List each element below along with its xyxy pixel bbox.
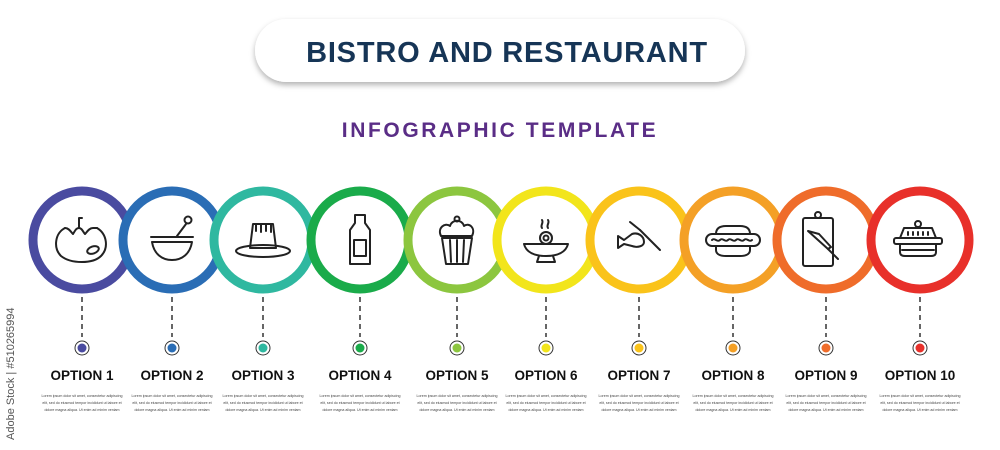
icon: cutting board and knife (803, 212, 838, 266)
option 6 (497, 191, 595, 412)
option 8: OPTION 8 (701, 368, 765, 383)
option 10: Lorem ipsum dolor sit amet, consectetur adipiscing (880, 394, 960, 398)
option 2 (123, 191, 221, 412)
option 4 (311, 191, 409, 412)
option 8: dolore magna aliqua. Ut enim ad minim veniam (695, 408, 771, 412)
option 1: Lorem ipsum dolor sit amet, consectetur adipiscing (42, 394, 122, 398)
option 4: Lorem ipsum dolor sit amet, consectetur adipiscing (320, 394, 400, 398)
option 3: Lorem ipsum dolor sit amet, consectetur adipiscing (223, 394, 303, 398)
option 5: OPTION 5 (425, 368, 489, 383)
option 7 (590, 191, 688, 412)
option 1: dolore magna aliqua. Ut enim ad minim veniam (44, 408, 120, 412)
option 10: OPTION 10 (885, 368, 955, 383)
option 3: dolore magna aliqua. Ut enim ad minim veniam (225, 408, 301, 412)
option 4: elit, sed do eiusmod tempor incididunt ut labore et (320, 401, 400, 405)
option 5 (408, 191, 506, 412)
option 10: dolore magna aliqua. Ut enim ad minim veniam (882, 408, 958, 412)
option 9: elit, sed do eiusmod tempor incididunt ut labore et (786, 401, 866, 405)
option 8: elit, sed do eiusmod tempor incididunt ut labore et (693, 401, 773, 405)
option 8: Lorem ipsum dolor sit amet, consectetur adipiscing (693, 394, 773, 398)
option 5: Lorem ipsum dolor sit amet, consectetur adipiscing (417, 394, 497, 398)
option 4: OPTION 4 (328, 368, 392, 383)
icon: noodles bowl (524, 220, 568, 262)
title: BISTRO AND RESTAURANT (306, 37, 708, 69)
icon: fish and knife (618, 222, 660, 250)
option 9: dolore magna aliqua. Ut enim ad minim veniam (788, 408, 864, 412)
option 6: elit, sed do eiusmod tempor incididunt ut labore et (506, 401, 586, 405)
option 7: OPTION 7 (607, 368, 671, 383)
icon: bottle (350, 215, 370, 264)
option 2: elit, sed do eiusmod tempor incididunt ut labore et (132, 401, 212, 405)
option 8 (684, 191, 782, 412)
option 1 (33, 191, 131, 412)
icon: cupcake (440, 216, 473, 264)
option 6: Lorem ipsum dolor sit amet, consectetur adipiscing (506, 394, 586, 398)
option 6: OPTION 6 (514, 368, 578, 383)
option 9 (777, 191, 875, 412)
option 9: Lorem ipsum dolor sit amet, consectetur adipiscing (786, 394, 866, 398)
subtitle: INFOGRAPHIC TEMPLATE (342, 119, 658, 142)
side watermark text: Adobe Stock | #510265994 (5, 307, 17, 440)
icon: pudding (236, 224, 290, 257)
option 5: dolore magna aliqua. Ut enim ad minim veniam (419, 408, 495, 412)
option 9: OPTION 9 (794, 368, 858, 383)
option 4: dolore magna aliqua. Ut enim ad minim veniam (322, 408, 398, 412)
option 3: OPTION 3 (231, 368, 295, 383)
option 3 (214, 191, 312, 412)
option 1: elit, sed do eiusmod tempor incididunt ut labore et (42, 401, 122, 405)
option 10 (871, 191, 969, 412)
option 2: Lorem ipsum dolor sit amet, consectetur adipiscing (132, 394, 212, 398)
option 10: elit, sed do eiusmod tempor incididunt ut labore et (880, 401, 960, 405)
icon: food container (894, 221, 942, 256)
option 1: OPTION 1 (50, 368, 114, 383)
option 5: elit, sed do eiusmod tempor incididunt ut labore et (417, 401, 497, 405)
icon: mortar and pestle (151, 216, 193, 260)
icon: tomato (56, 218, 106, 262)
option 2: dolore magna aliqua. Ut enim ad minim veniam (134, 408, 210, 412)
option 3: elit, sed do eiusmod tempor incididunt ut labore et (223, 401, 303, 405)
title (255, 19, 745, 82)
option 7: Lorem ipsum dolor sit amet, consectetur adipiscing (599, 394, 679, 398)
icon: hot dog (706, 226, 760, 256)
option 6: dolore magna aliqua. Ut enim ad minim veniam (508, 408, 584, 412)
option 7: elit, sed do eiusmod tempor incididunt ut labore et (599, 401, 679, 405)
option 2: OPTION 2 (140, 368, 204, 383)
option 7: dolore magna aliqua. Ut enim ad minim veniam (601, 408, 677, 412)
